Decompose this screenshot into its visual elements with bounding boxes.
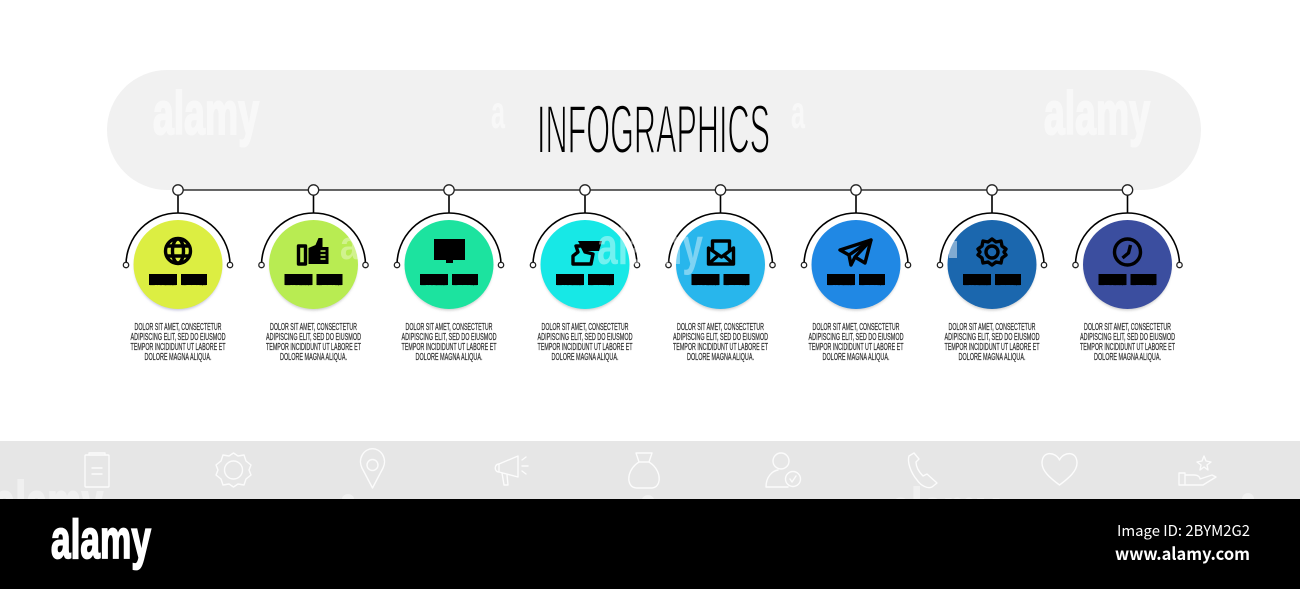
icon: clock [1114, 239, 1140, 265]
strip watermark fragments [342, 493, 1254, 505]
watermark small a: a [791, 86, 805, 138]
step 3 [394, 185, 504, 363]
icon: thumbs up [298, 238, 328, 264]
step 2 description: DOLOR SIT AMET, CONSECTETUR [270, 322, 357, 333]
step 2 shadow [270, 224, 357, 310]
icon strip panel [0, 441, 1300, 499]
step 1 arc [126, 213, 230, 265]
watermark fragment on circle 2: a [340, 224, 360, 268]
step 6 node [851, 185, 861, 195]
step 7 description: TEMPOR INCIDIDUNT UT LABORE ET [945, 342, 1040, 353]
step 4 description: DOLOR SIT AMET, CONSECTETUR [542, 322, 628, 333]
watermark small a: a [491, 86, 505, 138]
step 2 label: LOREM [286, 273, 311, 287]
step 8 description: DOLOR SIT AMET, CONSECTETUR [1084, 322, 1171, 333]
step 5 description: DOLORE MAGNA ALIQUA. [687, 352, 754, 363]
watermark fragment on circle 7 [949, 241, 957, 258]
icon: monitor [434, 239, 465, 263]
footer logo: alamy [51, 508, 151, 570]
watermark across circles: alamy [597, 218, 703, 276]
step 1 node [173, 185, 183, 195]
step 4 node [580, 185, 590, 195]
step 3 arc [397, 213, 501, 265]
strip watermark right: alamy [890, 477, 999, 544]
step 6 shadow [812, 224, 900, 310]
step 5 description [673, 322, 768, 363]
step 7 description: DOLOR SIT AMET, CONSECTETUR [948, 322, 1036, 333]
step 1 disc [134, 220, 222, 309]
step 3 description: DOLORE MAGNA ALIQUA. [416, 352, 482, 363]
icon: money bag [629, 453, 659, 488]
step 1 [123, 185, 233, 363]
step 3 description: ADIPISCING ELIT, SED DO EIUSMOD [402, 332, 496, 343]
step 6 description: TEMPOR INCIDIDUNT UT LABORE ET [809, 342, 904, 353]
step 2 description: ADIPISCING ELIT, SED DO EIUSMOD [266, 332, 361, 343]
step 7 [937, 185, 1047, 363]
step 4 description: ADIPISCING ELIT, SED DO EIUSMOD [538, 332, 632, 343]
watermark left: alamy [153, 80, 259, 147]
step 6 description [808, 322, 904, 363]
step 7 description: ADIPISCING ELIT, SED DO EIUSMOD [945, 332, 1039, 343]
step 7 disc [948, 220, 1036, 309]
step 5 description: DOLOR SIT AMET, CONSECTETUR [677, 322, 764, 333]
step 3 description: DOLOR SIT AMET, CONSECTETUR [406, 322, 492, 333]
step 6 description: DOLORE MAGNA ALIQUA. [822, 352, 890, 363]
step 4 description [538, 322, 633, 363]
step 8 label: LOREM [1100, 273, 1125, 287]
step 5 shadow [677, 224, 764, 310]
step 1 description: DOLORE MAGNA ALIQUA. [144, 352, 212, 363]
step 5 label: LOREM [692, 273, 718, 287]
website: www.alamy.com [1115, 540, 1250, 565]
step 7 shadow [948, 224, 1036, 310]
step 6 arc [804, 213, 908, 265]
step 2 disc [269, 220, 358, 309]
step 8 node [1122, 185, 1133, 195]
icon: gear [978, 239, 1006, 265]
icon: clipboard [85, 453, 109, 487]
step 4 label: LOREM [557, 273, 583, 287]
step 3 label: IPSUM [453, 273, 477, 287]
step 1 description: DOLOR SIT AMET, CONSECTETUR [134, 322, 222, 333]
step 6 label: LOREM [828, 273, 854, 287]
step 6 disc [812, 220, 900, 309]
step 5 disc [676, 220, 765, 309]
image id: Image ID: 2BYM2G2 [1117, 520, 1250, 541]
step 1 description: TEMPOR INCIDIDUNT UT LABORE ET [131, 342, 226, 353]
step 8 description [1080, 322, 1175, 363]
icon: user check [766, 453, 800, 487]
icon: globe [166, 238, 190, 264]
icon: settings gear [216, 453, 251, 487]
step 2 [259, 185, 368, 363]
step 4 arc [533, 213, 637, 265]
step 1 description [130, 322, 226, 363]
step 5 node [715, 185, 726, 195]
icon: phone [908, 453, 937, 488]
header panel [107, 70, 1201, 190]
step 5 [666, 185, 775, 363]
step 4 label: IPSUM [589, 273, 613, 287]
step 6 description: DOLOR SIT AMET, CONSECTETUR [812, 322, 900, 333]
step 7 arc [940, 213, 1044, 265]
footer bar [0, 499, 1300, 589]
step 4 shadow [542, 224, 628, 310]
step 5 arc [668, 213, 772, 265]
step 4 description: TEMPOR INCIDIDUNT UT LABORE ET [538, 342, 633, 353]
step 2 description: TEMPOR INCIDIDUNT UT LABORE ET [266, 342, 361, 353]
step 7 label: IPSUM [996, 273, 1020, 287]
watermark right: alamy [1044, 80, 1150, 147]
step 8 disc [1083, 220, 1172, 309]
icon: hand with pen [573, 241, 602, 264]
text: INFOGRAPHICS [537, 91, 770, 168]
step 6 description: ADIPISCING ELIT, SED DO EIUSMOD [809, 332, 903, 343]
step 7 node [987, 185, 997, 195]
step 8 arc [1076, 213, 1180, 265]
step 4 [530, 185, 640, 363]
step 7 label: LOREM [964, 273, 990, 287]
timeline connector [178, 189, 1128, 191]
step 3 description: TEMPOR INCIDIDUNT UT LABORE ET [402, 342, 497, 353]
step 7 description: DOLORE MAGNA ALIQUA. [958, 352, 1026, 363]
step 6 label: IPSUM [860, 273, 884, 287]
step 5 description: TEMPOR INCIDIDUNT UT LABORE ET [673, 342, 768, 353]
step 3 disc [404, 220, 494, 309]
step 2 label: IPSUM [318, 273, 342, 287]
step 8 description: TEMPOR INCIDIDUNT UT LABORE ET [1080, 342, 1175, 353]
step 4 disc [540, 220, 630, 309]
step 4 description: DOLORE MAGNA ALIQUA. [552, 352, 618, 363]
icon: open envelope [708, 241, 734, 264]
step 1 shadow [134, 224, 222, 310]
step 1 label: LOREM [150, 273, 176, 287]
step 2 node [308, 185, 319, 195]
step 1 label: IPSUM [182, 273, 206, 287]
icon: location pin [360, 449, 384, 488]
step 3 shadow [406, 224, 492, 310]
step 8 description: ADIPISCING ELIT, SED DO EIUSMOD [1080, 332, 1175, 343]
icon: paper plane [840, 240, 871, 265]
step 2 description: DOLORE MAGNA ALIQUA. [280, 352, 347, 363]
step 8 label: IPSUM [1132, 273, 1156, 287]
step 5 description: ADIPISCING ELIT, SED DO EIUSMOD [673, 332, 768, 343]
step 6 [801, 185, 911, 363]
step 3 label: LOREM [421, 273, 447, 287]
step 2 arc [262, 213, 366, 265]
step 7 description [944, 322, 1040, 363]
step 3 description [402, 322, 497, 363]
step 8 [1073, 185, 1182, 363]
icon: megaphone [495, 456, 528, 485]
step 2 description [266, 322, 361, 363]
icon: heart [1042, 454, 1077, 485]
step 3 node [444, 185, 454, 195]
step 5 label: IPSUM [724, 273, 748, 287]
step 1 description: ADIPISCING ELIT, SED DO EIUSMOD [131, 332, 225, 343]
step 8 shadow [1084, 224, 1171, 310]
step 8 description: DOLORE MAGNA ALIQUA. [1094, 352, 1161, 363]
icon: hand with star [1179, 456, 1216, 485]
